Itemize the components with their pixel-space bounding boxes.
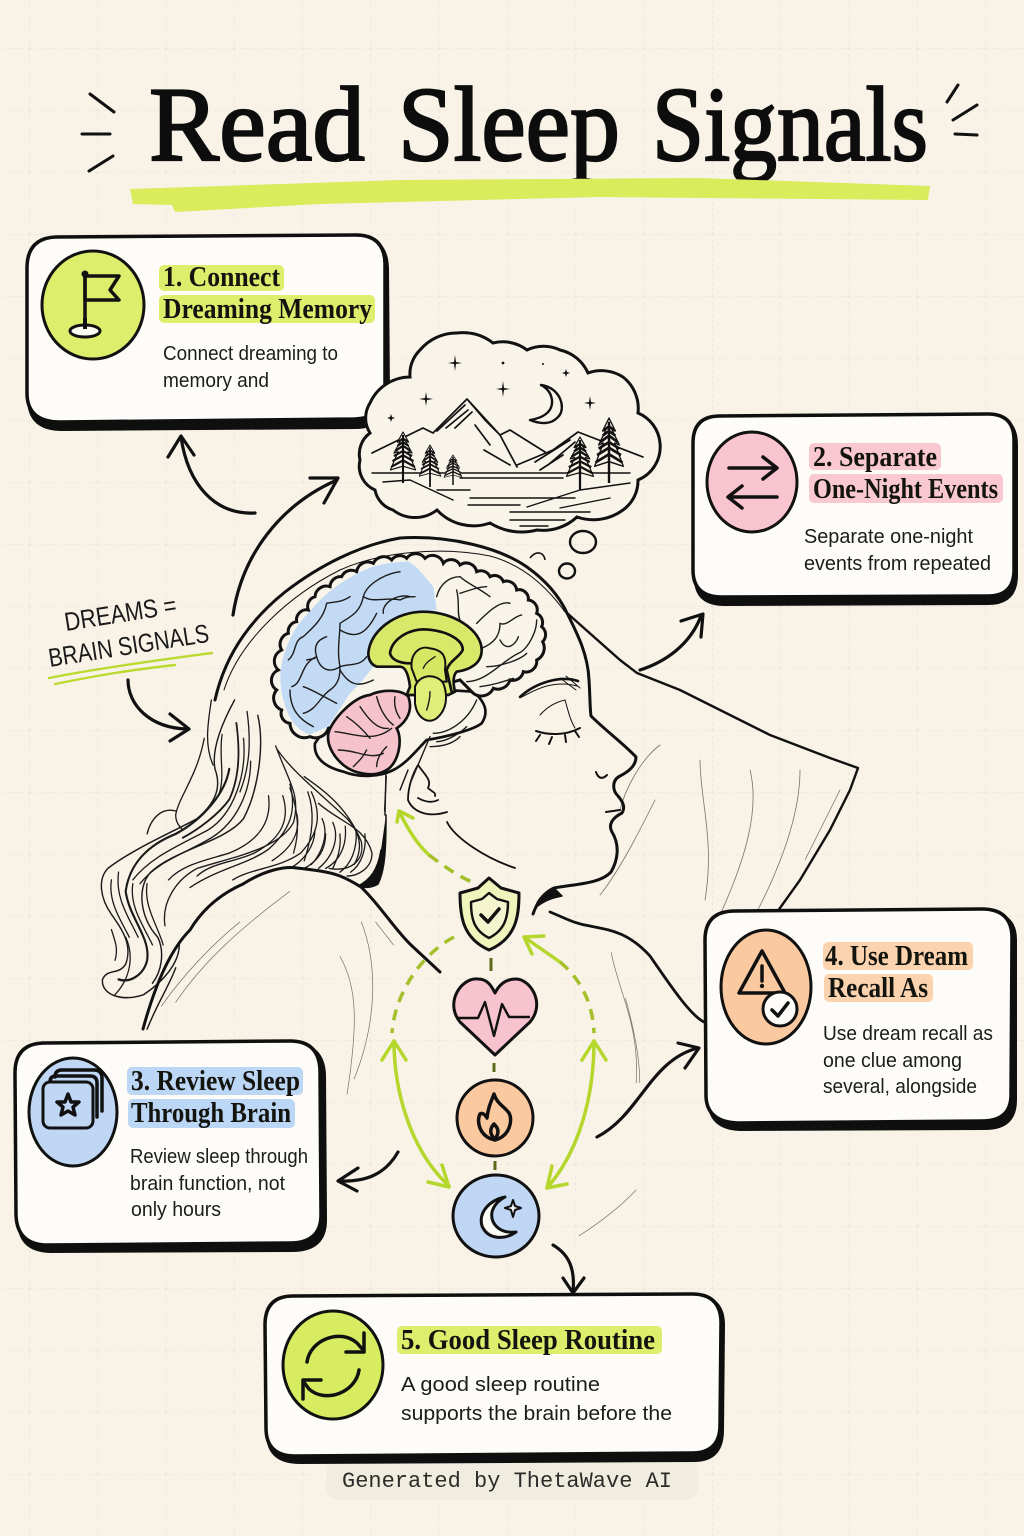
heading: Recall As bbox=[828, 973, 928, 1004]
title sparks left bbox=[82, 94, 114, 171]
heading: 2. Separate bbox=[813, 442, 937, 473]
heading: 5. Good Sleep Routine bbox=[401, 1325, 655, 1356]
woman illustration bbox=[101, 538, 858, 1236]
blue lobe bbox=[280, 562, 437, 734]
dream scene: mountains bbox=[372, 399, 643, 526]
heading: 3. Review Sleep bbox=[131, 1066, 300, 1097]
hair strands bbox=[101, 700, 386, 1029]
body text: Use dream recall as bbox=[823, 1022, 993, 1045]
handwritten note: dreams = brain signals: BRAIN SIGNALS bbox=[46, 618, 211, 673]
heading: One-Night Events bbox=[813, 474, 998, 505]
dream scene: trees bbox=[390, 418, 623, 490]
footer label bbox=[326, 1458, 698, 1500]
heading bbox=[127, 1066, 303, 1129]
body text bbox=[823, 1022, 993, 1098]
heading bbox=[809, 442, 1003, 505]
card 5: good sleep routine bbox=[265, 1294, 725, 1464]
icon: flame bbox=[457, 1080, 533, 1156]
arrow: to card 1 bbox=[168, 436, 255, 513]
icon: heart with pulse bbox=[454, 979, 537, 1055]
dream scene: stars bbox=[387, 355, 596, 422]
title sparks right bbox=[947, 85, 977, 135]
cerebellum bbox=[328, 691, 410, 774]
heading: 4. Use Dream bbox=[825, 941, 968, 972]
arrow: to card 3 bbox=[338, 1152, 398, 1191]
brain stem and lower lobes bbox=[315, 687, 485, 776]
heading bbox=[823, 941, 973, 1004]
jaw and ear bbox=[408, 765, 515, 868]
body text bbox=[804, 525, 991, 575]
body text: supports the brain before the bbox=[401, 1402, 672, 1425]
body text: A good sleep routine bbox=[401, 1373, 600, 1396]
heading: Dreaming Memory bbox=[163, 294, 372, 325]
arrow: to card 4 bbox=[597, 1043, 699, 1137]
dream scene: moon bbox=[530, 385, 562, 423]
thought bubbles bbox=[530, 531, 596, 578]
icon: warning with check bbox=[721, 930, 811, 1044]
brain folds bbox=[288, 572, 537, 727]
body text: Connect dreaming to bbox=[163, 342, 338, 365]
title: Signals bbox=[652, 66, 928, 183]
title: Sleep bbox=[398, 66, 620, 183]
card 2: separate one-night events bbox=[693, 414, 1018, 606]
arrow: right loop bbox=[524, 936, 606, 1188]
title underline highlight bbox=[130, 178, 930, 212]
green signal arrows bbox=[382, 811, 606, 1188]
body text: Review sleep through bbox=[130, 1145, 308, 1168]
card 1: connect dreaming memory bbox=[27, 235, 390, 431]
neck, shoulder and body bbox=[143, 815, 640, 1236]
brain bbox=[271, 554, 546, 780]
arrow: brain to dream bbox=[233, 478, 338, 615]
title bbox=[149, 66, 928, 183]
body text bbox=[130, 1145, 308, 1221]
limbic system bbox=[368, 612, 482, 721]
arrow: shield to brain bbox=[397, 811, 472, 882]
thought cloud bbox=[359, 333, 660, 532]
footer label: Generated by ThetaWave AI bbox=[342, 1469, 672, 1494]
icon: swap arrows bbox=[707, 432, 797, 532]
pillow bbox=[550, 613, 858, 1022]
handwritten note: dreams = brain signals: DREAMS = bbox=[62, 590, 179, 637]
heading: 1. Connect bbox=[163, 262, 281, 293]
body text: several, alongside bbox=[823, 1075, 977, 1098]
arrow: left loop bbox=[382, 937, 454, 1187]
icon: flag bbox=[42, 251, 144, 359]
body text: only hours bbox=[131, 1198, 221, 1221]
body text bbox=[401, 1373, 672, 1425]
body text: Separate one-night bbox=[804, 525, 973, 548]
card 3: review sleep through brain bbox=[15, 1041, 327, 1253]
body text bbox=[163, 342, 338, 392]
body text: one clue among bbox=[823, 1049, 962, 1072]
icon: cards with star bbox=[29, 1058, 117, 1166]
body text: memory and bbox=[163, 369, 269, 392]
heading: Through Brain bbox=[131, 1098, 291, 1129]
head and face profile bbox=[215, 538, 636, 914]
body text: events from repeated bbox=[804, 552, 991, 575]
arrow: note to head bbox=[128, 680, 189, 741]
handwritten note: dreams = brain signals bbox=[46, 590, 212, 684]
title: Read bbox=[149, 66, 365, 183]
icon: moon and star bbox=[453, 1175, 539, 1257]
body text: brain function, not bbox=[130, 1172, 285, 1195]
cerebrum outline bbox=[271, 554, 546, 738]
card 4: use dream recall bbox=[705, 909, 1017, 1131]
connector dashes bbox=[491, 958, 495, 1170]
heading bbox=[159, 262, 375, 325]
icon: refresh arrows bbox=[283, 1311, 383, 1419]
icon: shield with check bbox=[460, 878, 519, 950]
arrow: to card 5 bbox=[553, 1245, 584, 1293]
arrow: to card 2 bbox=[640, 614, 703, 670]
